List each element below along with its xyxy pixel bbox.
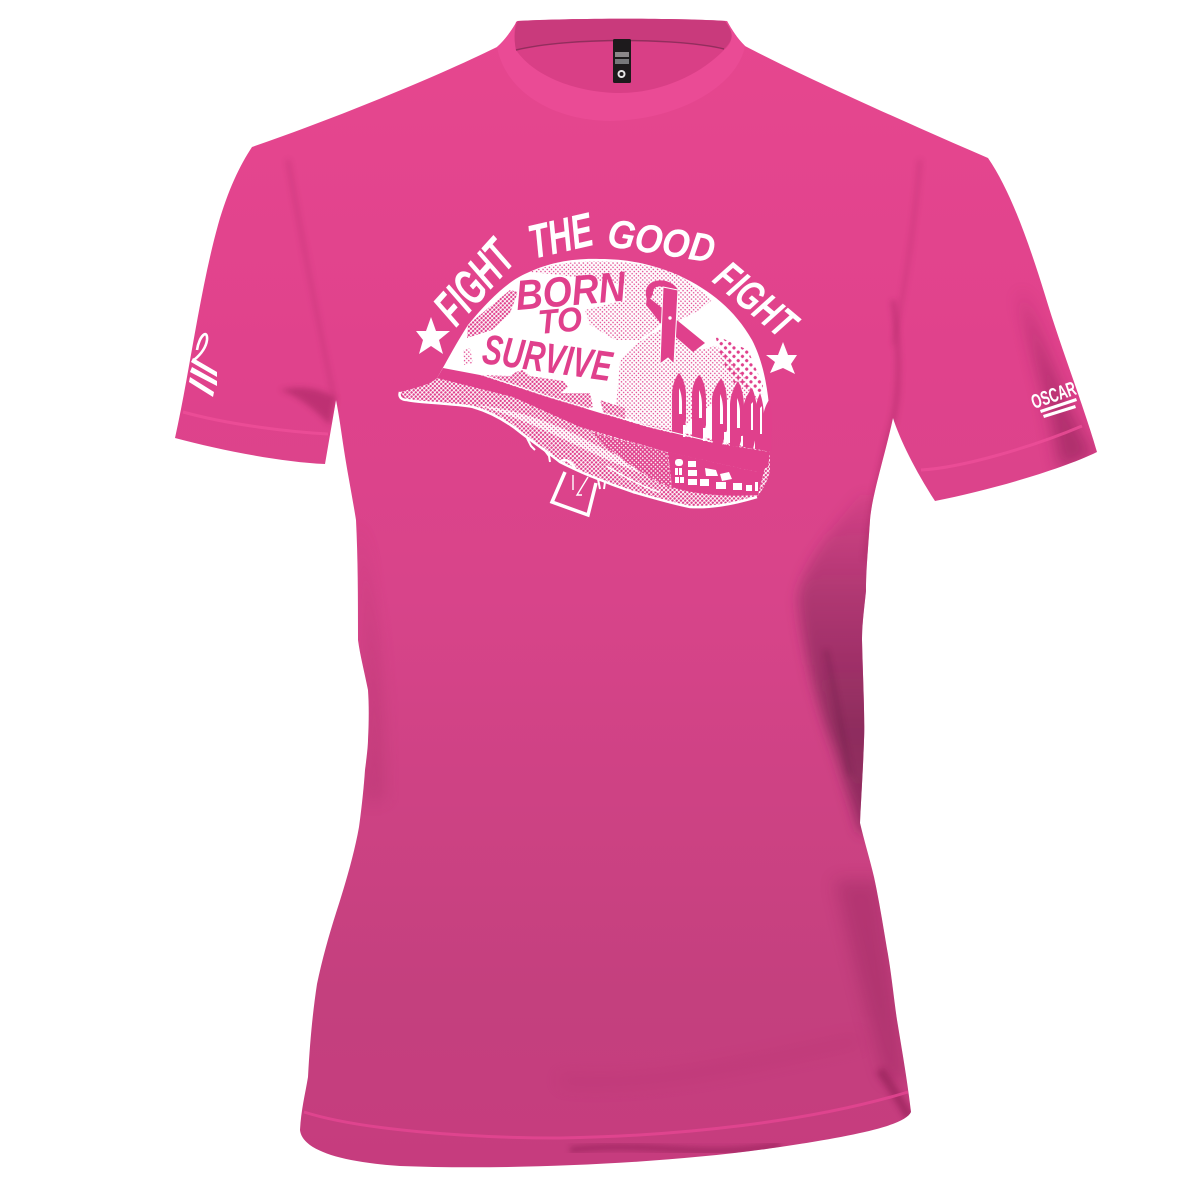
bottom hem (304, 1092, 908, 1138)
bullets in band (672, 373, 772, 451)
cartridge belt panel (668, 452, 765, 496)
helmet brim (400, 378, 770, 507)
left sleeve ribbon chevron emblem (189, 334, 217, 397)
born to survive stencil text: TO (536, 300, 584, 342)
helmet band (437, 368, 770, 472)
back neck band (515, 19, 732, 50)
brim white contour stripe (606, 466, 660, 492)
collar rib (497, 21, 745, 121)
brim highlight (476, 405, 690, 488)
helmet graphic (400, 203, 808, 515)
brim outline (400, 392, 757, 507)
camouflage halftone patches (463, 261, 763, 438)
fight the good fight heading: FIGHT (423, 227, 528, 335)
born to survive stencil text: SURVIVE (480, 325, 616, 390)
brim shaded stripe under band (590, 432, 672, 488)
chin strap buckle (552, 460, 596, 515)
born to survive stencil text: BORN (514, 262, 629, 319)
fight the good fight heading (423, 203, 808, 349)
fight the good fight heading: THE (524, 203, 599, 270)
right star (766, 342, 797, 374)
right sleeve hem (921, 426, 1082, 470)
helmet dome (437, 259, 771, 450)
t-shirt (175, 19, 1097, 1167)
fabric shading (280, 160, 1095, 1151)
right sleeve OSCAR logo: OSCAR (1028, 378, 1079, 414)
fight the good fight heading: GOOD (605, 211, 718, 272)
left sleeve hem (183, 412, 328, 434)
born to survive stencil text (480, 262, 629, 390)
right sleeve OSCAR logo (1028, 378, 1079, 418)
fight the good fight heading: FIGHT (705, 252, 808, 349)
collar seam shadow (516, 40, 724, 50)
left star (416, 317, 450, 354)
chin strap drips (527, 438, 605, 489)
ribbon emblem on helmet (646, 280, 705, 364)
inner neck opening (514, 19, 732, 93)
band highlight line (480, 374, 713, 442)
neck label tag (613, 39, 631, 83)
shirt body silhouette (175, 19, 1097, 1167)
bullet highlights (679, 388, 762, 446)
